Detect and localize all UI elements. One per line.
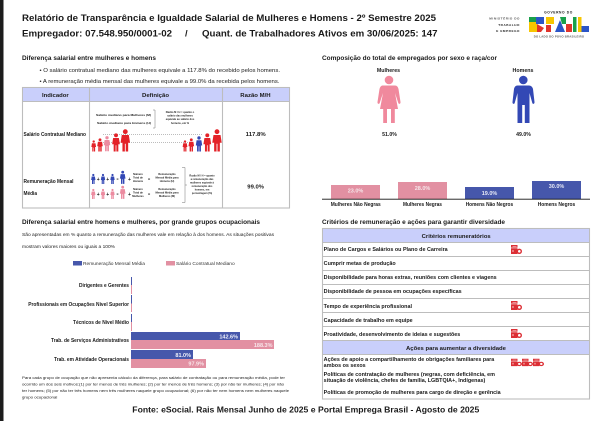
panel: indicator table: 99.0% [247,184,264,190]
bar chart: pay ratio by occupational group: Trab. de Serviços Administrativos [51,338,129,344]
bullet text: • A remuneração média mensal das mulheres equivale a 99.0% da recebida pelos homens. [40,79,280,85]
panel: criteria table: Plano de Cargos e Salários ou Plano de Carreira [324,247,448,253]
logo: ministry: E EMPREGO [496,29,520,33]
bar chart: pay ratio by occupational group: 188.3% [254,343,273,349]
footnote: grupo ocupacional [22,395,57,400]
panel: criteria table: Disponibilidade para horas extras, reuniões com clientes e viagens [324,275,497,281]
logo: Governo do Brasil [529,10,589,38]
icons: criteria marked [511,245,543,366]
bullet text [40,68,280,85]
chart legend: Salário Contratual Mediano [176,261,235,266]
diagram: average pay definition: Mulheres (M) [159,194,175,198]
diagram: average pay definition: Número [133,172,143,176]
heading: criteria and actions: Critérios de remuneração e ações para garantir diversidade [322,220,506,226]
footnote: Para cada grupo de ocupação que não apresenta cálculo da diferença, para salário de contratação ou para remuneração média, pode ter [22,375,286,380]
logo: ministry: MINISTÉRIO DO [489,16,520,20]
chart legend [73,261,235,266]
logo: Governo do Brasil: DO LADO DO POVO BRASILEIRO [534,34,585,38]
header title: Quant. de Trabalhadores Ativos em 30/06/2025: 147 [202,28,438,38]
explanatory text: São apresentadas em % quanto a remuneração das mulheres vale em relação à dos homens. As situações positivas [22,232,274,237]
panel: men share [512,68,535,138]
diagram: average pay definition: Homens [133,179,144,183]
panel: women share [377,68,401,138]
header title: Relatório de Transparência e Igualdade Salarial de Mulheres e Homens - 2º Semestre 2025 [22,12,436,23]
diagram: average pay definition: Número [133,187,143,191]
panel: criteria table [322,228,590,399]
bar chart: composition by sex and race: 28.0% [415,186,430,192]
diagram: average pay definition: a remuneração das [191,178,214,181]
bullet text: • O salário contratual mediano das mulheres equivale a 117.8% do recebido pelos homens. [40,68,280,74]
diagram: average pay definition: Mulheres [132,194,144,198]
panel: criteria table: Cumprir metas de produção [324,261,396,267]
diagram: contractual salary definition [91,110,222,152]
panel: criteria table: Ações para aumentar a diversidade [406,346,506,352]
diagram: contractual salary definition: homens, em % [171,121,190,125]
panel: indicator table: Definição [142,93,169,99]
panel: criteria table: Tempo de experiência profissional [324,304,413,310]
explanatory text [22,232,274,249]
diagram: contractual salary definition: Salário mediano para Homens (H) [97,121,151,125]
panel: indicator table: 117.8% [246,132,266,138]
diagram: contractual salary definition: Razão M / H = quanto o [166,110,195,114]
heading: occupational groups: Diferença salarial entre homens e mulheres, por grande grupos ocupacionais [22,219,260,226]
diagram: average pay definition: + [106,192,109,198]
diagram: contractual salary definition: equivale ao salário dos [166,117,195,121]
diagram: average pay definition: Homens (H) [160,179,174,183]
panel: women share: 51.0% [382,132,397,138]
panel: men share: Homens [513,68,533,74]
bar chart: composition by sex and race: Mulheres Negras [403,202,442,208]
chart legend: Remuneração Mensal Média [83,261,146,266]
bar chart: pay ratio by occupational group: Profissionais em Ocupações Nível Superior [28,302,129,308]
panel: men share: 49.0% [516,132,531,138]
panel: indicator table: Remuneração Mensal [24,179,74,185]
bar chart: composition by sex and race: 19.0% [482,191,497,197]
panel: criteria table: Capacidade de trabalho em equipe [324,318,413,324]
diagram: average pay definition: = [148,192,151,196]
footnote: ter homens; (5) por não ter três homens nem três mulheres naquele grupo ocupacional; (6) por não ter nem homens nem mulheres naquele [22,388,289,393]
diagram: average pay definition: Remuneração [158,187,176,191]
panel: indicator table: Média [24,191,37,197]
panel: criteria table: ambos os sexos [324,363,366,369]
diagram: average pay definition: Total de [133,190,143,194]
panel: indicator table [22,88,290,208]
bar chart: composition by sex and race: Homens Negros [538,202,575,208]
diagram: average pay definition: homens, em [195,188,210,192]
bar chart: pay ratio by occupational group: Dirigentes e Gerentes [79,283,129,289]
logo: ministry: TRABALHO [498,23,520,27]
diagram: average pay definition: + [128,192,131,198]
footnote: ocorrido um dos seis motivos:(1) por ter menos de três mulheres; (2) por ter menos de três homens; (3) por não ter mulheres; (4) por não [22,381,284,386]
diagram: average pay definition: = [116,178,119,182]
diagram: average pay definition: mulheres equivale à [190,182,215,184]
bar chart: pay ratio by occupational group [28,277,274,368]
header title: Empregador: 07.548.950/0001-02 [22,28,172,38]
diagram: average pay definition: Razão M / H = quanto [189,174,215,178]
explanatory text: mostram valores maiores ou iguais a 100% [22,244,115,249]
heading: composition: Composição do total de empregados por sexo e raça/cor [322,55,498,62]
panel: criteria table: Políticas de contratação de mulheres (negras, com deficiência, em [324,372,495,378]
bar chart: pay ratio by occupational group: Trab. em Atividade Operacionais [54,357,129,363]
panel: women share: Mulheres [377,68,400,74]
panel: criteria table: Ações de apoio a compartilhamento de obrigações familiares para [324,357,494,363]
diagram: average pay definition: = [148,176,151,182]
diagram: average pay definition: Mensal Média para [155,190,179,194]
panel: criteria table: Proatividade, desenvolvimento de ideias e sugestões [324,332,460,338]
diagram: average pay definition: Remuneração [158,172,176,176]
bar chart: pay ratio by occupational group: 97.9% [188,362,204,368]
diagram: average pay definition: + [97,192,100,198]
diagram: average pay definition: remuneração dos [192,185,213,188]
panel: criteria table: Políticas de promoção de mulheres para cargo de direção e gerência [324,390,501,396]
panel: criteria table: Critérios remuneratórios [422,234,491,240]
diagram: average pay definition: = [116,192,119,196]
diagram: average pay definition: porcentagem (%) [192,192,212,195]
bar chart: pay ratio by occupational group: 142.6% [219,334,238,340]
source: Fonte: eSocial. Rais Mensal Junho de 2025 e Portal Emprega Brasil - Agosto de 2025 [132,406,480,414]
logo: ministry [489,16,520,33]
header title [22,12,438,38]
bar chart: composition by sex and race: 30.0% [549,184,564,190]
bar chart: composition by sex and race: Mulheres Não Negras [331,202,381,208]
diagram: average pay definition: Total de [133,176,143,180]
bar chart: pay ratio by occupational group: Técnicos de Nível Médio [73,320,130,326]
panel: criteria table: situação de violência, chefes de família, LGBTQIA+, Indígenas) [324,378,486,384]
panel: criteria table: Disponibilidade de pessoa em ocupações específicas [324,289,462,295]
diagram: contractual salary definition: Salário mediano para Mulheres (M) [96,113,151,117]
header title: / [185,28,188,38]
logo: Governo do Brasil: GOVERNO DO [544,10,573,14]
bar chart: composition by sex and race: Homens Não Negros [466,202,513,208]
diagram: average pay definition: Mensal Média para [155,176,179,180]
diagram: average pay definition: + [97,177,100,183]
heading: salary difference: Diferença salarial entre mulheres e homens [22,55,157,62]
bar chart: composition by sex and race [322,181,590,208]
panel: indicator table: Salário Contratual Mediano [24,132,87,138]
footnote [22,375,289,400]
bar chart: pay ratio by occupational group: 81.0% [175,353,191,359]
bar chart: composition by sex and race: 23.0% [348,188,363,194]
diagram: average pay definition [91,168,215,202]
diagram: average pay definition: + [128,177,131,183]
panel: indicator table: Razão M/H [240,93,271,99]
diagram: average pay definition: + [106,177,109,183]
panel: indicator table: Indicador [42,93,69,99]
diagram: contractual salary definition: salário das mulheres [167,114,193,118]
